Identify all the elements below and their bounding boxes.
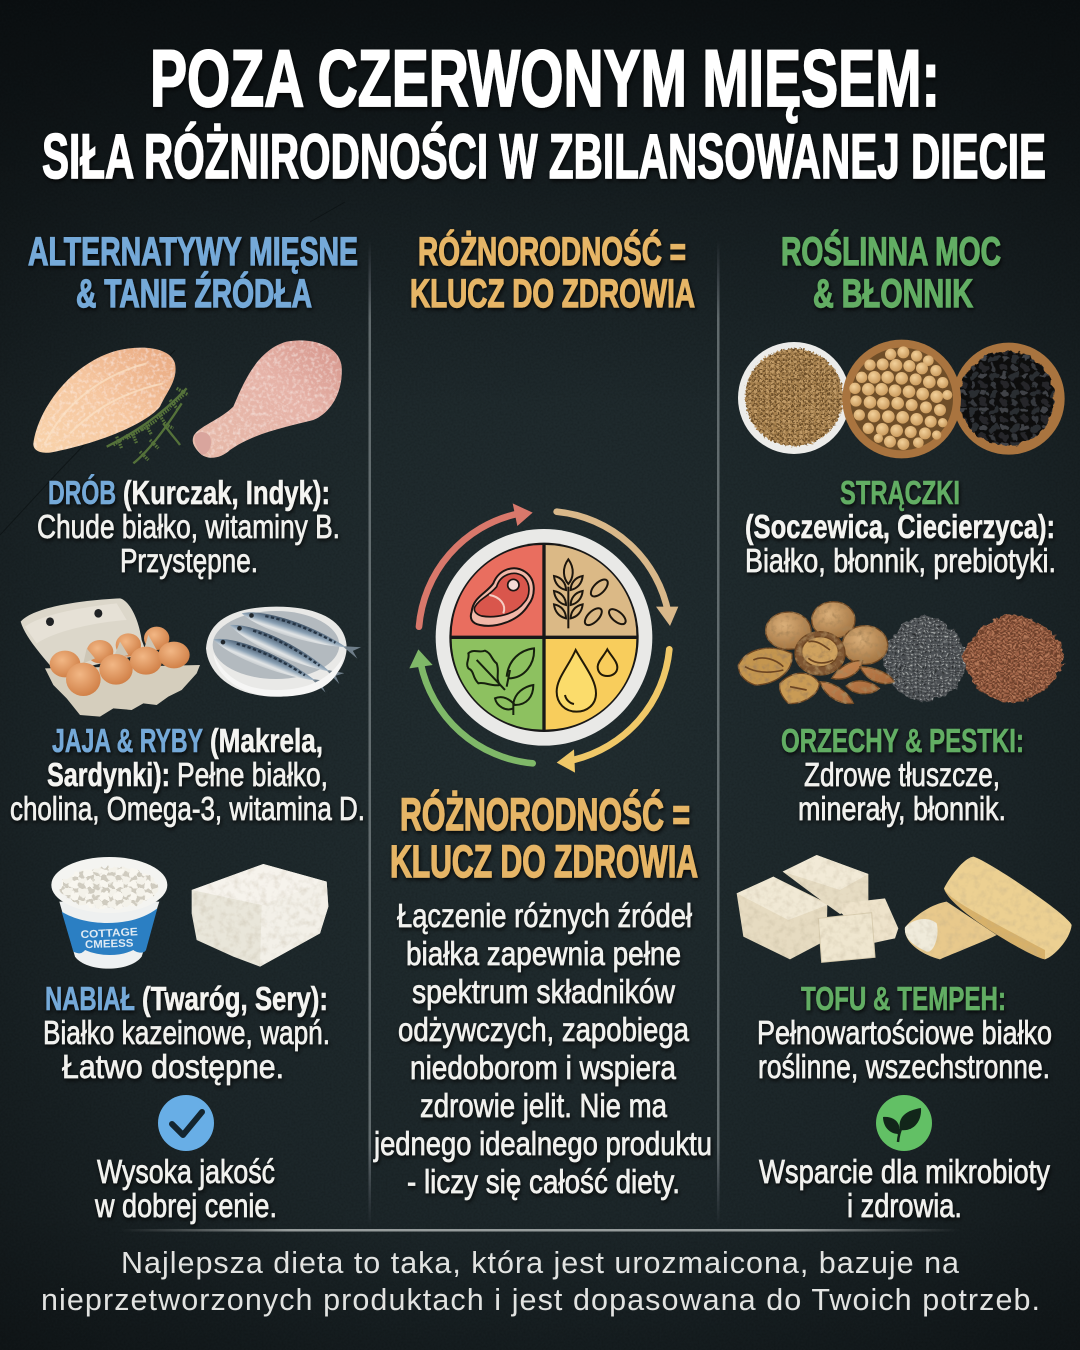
panel: left column <box>10 230 365 1224</box>
image: tofu and tempeh <box>737 855 1072 962</box>
text: drób <box>37 474 340 579</box>
text: centre paragraph: jednego idealnego produktu <box>373 1125 712 1162</box>
text: jaja i ryby: (Makrela, <box>210 722 323 759</box>
text: strączki <box>745 474 1056 579</box>
text: jaja i ryby: Pełne białko, <box>177 756 328 793</box>
quadrant: protein <box>452 545 542 636</box>
heading: różnorodność lower <box>390 789 698 887</box>
image: cottage cheese cup and white cheese <box>51 857 328 969</box>
text: jaja i ryby <box>10 722 365 827</box>
callout: wysoka jakość <box>94 1153 277 1224</box>
text: jaja i ryby: Sardynki): <box>47 756 170 793</box>
heading: różnorodność lower: KLUCZ DO ZDROWIA <box>390 836 698 887</box>
text: orzechy i pestki: Zdrowe tłuszcze, <box>804 756 1000 793</box>
arrow: red <box>419 503 533 627</box>
callout: wysoka jakość: w dobrej cenie. <box>94 1187 277 1224</box>
text: centre paragraph: - liczy się całość diety. <box>407 1163 680 1200</box>
text: nabiał: (Twaróg, Sery): <box>142 980 328 1017</box>
icon: check badge <box>158 1095 214 1151</box>
text: tofu i tempeh <box>757 980 1052 1085</box>
panel: right column <box>737 228 1072 1224</box>
text: drób: Przystępne. <box>120 542 258 579</box>
text: orzechy i pestki: minerały, błonnik. <box>798 790 1006 827</box>
arrow: green <box>409 649 533 763</box>
text: orzechy i pestki <box>781 722 1024 827</box>
text: centre paragraph: zdrowie jelit. Nie ma <box>420 1087 668 1124</box>
text: centre paragraph: spektrum składników <box>412 973 675 1010</box>
text: jaja i ryby: JAJA & RYBY <box>52 722 203 759</box>
text: jaja i ryby: cholina, Omega-3, witamina D. <box>10 790 365 827</box>
heading: różnorodność top: RÓŻNORODNOŚĆ = <box>418 228 686 274</box>
footer divider <box>120 1229 960 1232</box>
plate ring <box>436 529 652 746</box>
text: centre paragraph: Łączenie różnych źródeł <box>397 897 693 934</box>
text: drób: Chude białko, witaminy B. <box>37 508 340 545</box>
image: nuts and seeds <box>738 602 1065 704</box>
icon: leaf badge <box>876 1095 932 1151</box>
text: tofu i tempeh: TOFU & TEMPEH: <box>801 980 1006 1017</box>
callout: wysoka jakość: Wysoka jakość <box>97 1153 275 1190</box>
heading: roślinna moc <box>781 228 1001 316</box>
text: centre paragraph: odżywczych, zapobiega <box>398 1011 690 1048</box>
text: drób: (Kurczak, Indyk): <box>123 474 330 511</box>
text: nabiał: NABIAŁ <box>45 980 135 1017</box>
title <box>42 34 1046 192</box>
text: nabiał: Białko kazeinowe, wapń. <box>43 1014 330 1051</box>
image: eggs in carton and mackerel bowl <box>21 598 362 717</box>
diagram: plate with cycle arrows <box>409 503 678 773</box>
heading: alternatywy mięsne: ALTERNATYWY MIĘSNE <box>28 230 358 274</box>
text: centre paragraph: niedoborom i wspiera <box>410 1049 677 1086</box>
quadrant: vegetables <box>452 639 542 730</box>
text: strączki: STRĄCZKI <box>840 474 960 511</box>
heading: roślinna moc: & BŁONNIK <box>813 272 973 316</box>
arrow: tan <box>557 512 678 626</box>
arrow: yellow <box>557 649 669 773</box>
heading: różnorodność top: KLUCZ DO ZDROWIA <box>410 272 695 316</box>
image: chicken breast and thigh <box>33 340 342 463</box>
text: centre paragraph <box>373 897 712 1200</box>
image: cottage cheese cup and white cheese: COTTAGE <box>80 926 138 941</box>
column dividers <box>368 240 720 1225</box>
heading: alternatywy mięsne <box>28 230 358 316</box>
footer text: nieprzetworzonych produktach i jest dopasowana do Twoich potrzeb. <box>41 1283 1040 1317</box>
panel: centre column <box>373 228 712 1200</box>
heading: różnorodność top <box>410 228 695 316</box>
text: centre paragraph: białka zapewnia pełne <box>406 935 681 972</box>
image: cottage cheese cup and white cheese: CMEESS <box>85 937 134 951</box>
callout: wsparcie dla mikrobioty: i zdrowia. <box>847 1187 962 1224</box>
heading: alternatywy mięsne: & TANIE ŹRÓDŁA <box>76 270 312 316</box>
image: three bowls of legumes <box>738 340 1065 458</box>
text: nabiał: Łatwo dostępne. <box>62 1048 284 1085</box>
callout: wsparcie dla mikrobioty <box>759 1153 1050 1224</box>
footer text <box>41 1246 1040 1317</box>
quadrant: oils <box>546 639 636 730</box>
quadrant: grains <box>546 545 636 636</box>
footer text: Najlepsza dieta to taka, która jest urozmaicona, bazuje na <box>121 1246 959 1280</box>
heading: różnorodność lower: RÓŻNORODNOŚĆ = <box>400 789 690 840</box>
text: drób: DRÓB <box>48 474 116 511</box>
text: nabiał <box>43 980 330 1085</box>
